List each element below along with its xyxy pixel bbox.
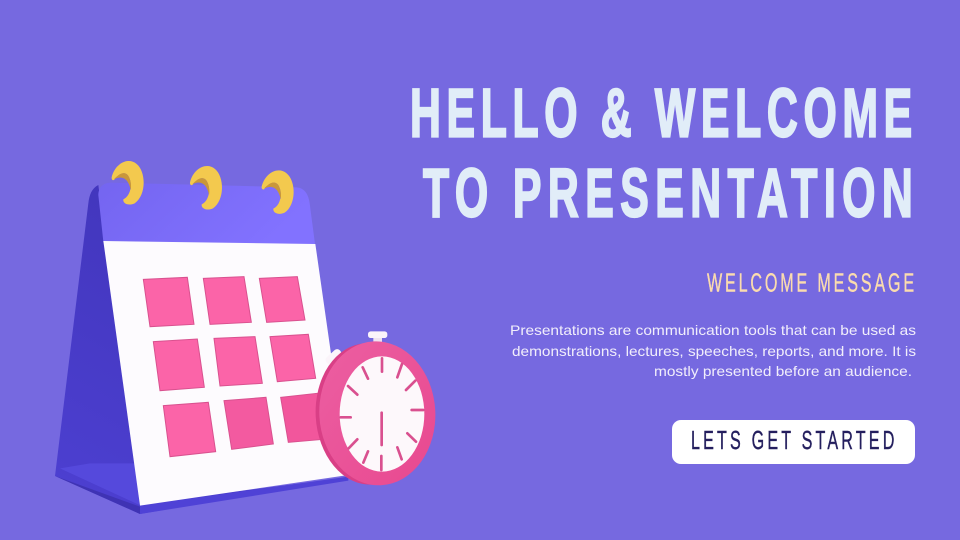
ring 3 — [262, 170, 294, 214]
calendar gold binder rings — [112, 161, 294, 214]
stopwatch — [312, 331, 439, 488]
stopwatch case — [312, 341, 425, 487]
calendar date cells — [143, 277, 323, 457]
title — [410, 75, 913, 232]
button: lets get started — [672, 420, 915, 464]
calendar header band — [98, 183, 315, 244]
body line 2: demonstrations, lectures, speeches, reports, and more. It is — [512, 343, 916, 359]
ring 2 — [190, 166, 222, 210]
body line 3: mostly presented before an audience. — [654, 363, 912, 379]
body line 1: Presentations are communication tools that can be used as — [510, 322, 916, 338]
button label: LETS GET STARTED — [691, 425, 894, 455]
stopwatch ticks and hand — [341, 358, 423, 470]
subheading: WELCOME MESSAGE — [707, 267, 914, 298]
stopwatch crown — [368, 331, 387, 347]
title line 2: TO PRESENTATION — [423, 155, 913, 232]
body text — [510, 322, 916, 379]
stopwatch face — [340, 356, 424, 472]
button background — [672, 420, 915, 464]
stopwatch side button — [324, 348, 348, 371]
calendar white page — [103, 241, 348, 506]
title line 1: HELLO & WELCOME — [410, 75, 912, 152]
ring 1 — [112, 161, 144, 205]
illustration: desk calendar with stopwatch — [55, 161, 439, 514]
calendar back stand — [55, 185, 350, 514]
